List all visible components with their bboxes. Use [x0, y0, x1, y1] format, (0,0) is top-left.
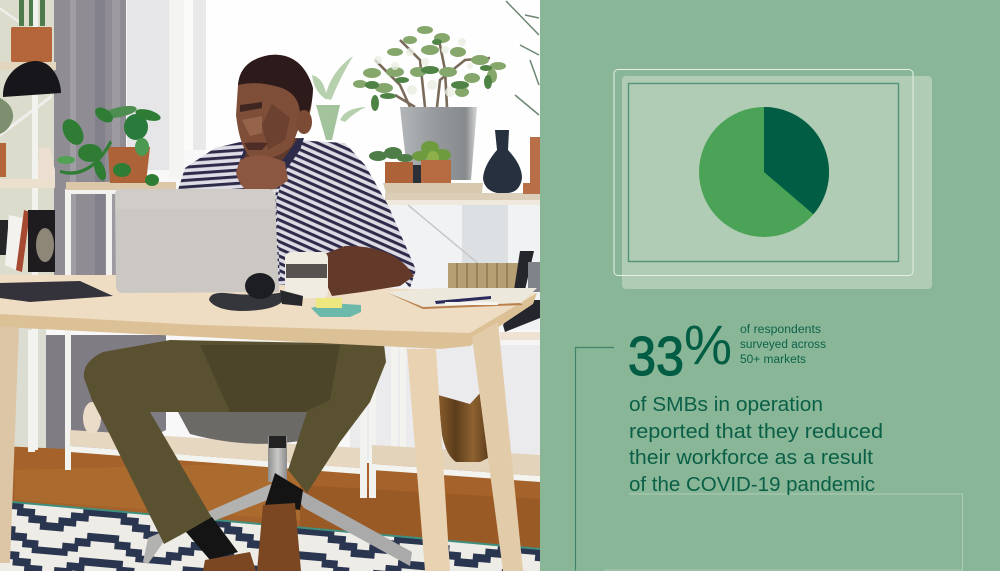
pie chart: 33% [699, 107, 829, 237]
wood floor [12, 446, 540, 527]
snake plant and pot [11, 0, 52, 62]
panel: green background [540, 0, 1000, 571]
metal bucket planter [400, 107, 477, 180]
left connector line [576, 348, 614, 570]
caption: respondents surveyed: 50+ markets [740, 354, 806, 366]
body text: workforce reduction: of the COVID-19 pandemic [629, 473, 875, 496]
white ornament [83, 402, 101, 434]
man's head [236, 55, 312, 159]
small desk shelf [66, 182, 176, 190]
wooden bowl [438, 392, 488, 462]
body text: workforce reduction: reported that they reduced [629, 420, 883, 443]
man's neck and collar [240, 138, 304, 190]
left pot [0, 143, 6, 177]
man's hair [238, 55, 313, 118]
books [0, 210, 55, 272]
body text: workforce reduction: of SMBs in operation [629, 393, 823, 416]
coffee mug [285, 252, 328, 298]
left wall [0, 0, 56, 275]
statistic: 33%: % [684, 313, 732, 376]
palm fronds [506, 1, 539, 115]
statistic: 33%: 33 [628, 325, 684, 387]
sticky notes [311, 298, 361, 317]
card: translucent rectangle behind chart [622, 76, 932, 289]
inner dark frame [628, 84, 898, 262]
box of books [448, 251, 540, 332]
photo: man working at a laptop at a desk [0, 0, 540, 571]
clipboard with pen [386, 288, 537, 309]
wooden tray and shelf [383, 183, 540, 205]
shoes [203, 503, 301, 571]
striped rug [0, 501, 540, 571]
body text: workforce reduction: their workforce as a result [629, 446, 873, 469]
caption: respondents surveyed: of respondents [740, 324, 821, 336]
white diagonal shelf braces [0, 7, 52, 137]
jade plant [353, 26, 506, 111]
caption: respondents surveyed: surveyed across [740, 339, 826, 351]
window and white wall background [46, 0, 540, 463]
statistic: 33% [628, 313, 732, 387]
lower left wall [14, 328, 46, 448]
white ceramic vase [38, 148, 55, 180]
white shelving frames [28, 0, 406, 498]
pale plant behind man [312, 56, 366, 140]
small plants and terracotta pots [369, 141, 451, 183]
diagonal rod [408, 205, 480, 265]
back desk leg [472, 322, 523, 571]
caption: respondents surveyed [740, 324, 826, 366]
dark vase [483, 130, 522, 193]
headphones [209, 273, 303, 311]
man's forearm and hand [322, 246, 414, 296]
desk [0, 275, 537, 349]
front desk leg [407, 349, 450, 571]
green pothos plant [57, 104, 162, 186]
man's ear [296, 110, 312, 134]
upper left shelves [0, 62, 56, 188]
chair [143, 408, 412, 566]
socks [186, 473, 303, 560]
trousers [84, 340, 386, 544]
right terracotta pot [523, 137, 540, 194]
grey curtain [44, 0, 166, 452]
man's hand at chin [236, 155, 288, 193]
left desk leg [0, 327, 19, 563]
white outline frame [614, 70, 913, 276]
laptop [115, 189, 279, 293]
rug edge [12, 502, 540, 549]
man's striped shirt [178, 140, 416, 288]
body text: workforce reduction [629, 393, 883, 496]
folder on desk [0, 281, 113, 302]
left small plant [0, 98, 13, 134]
black dome lamp [3, 61, 61, 97]
lower right thin frame [604, 494, 962, 570]
lower shelves [70, 332, 540, 482]
